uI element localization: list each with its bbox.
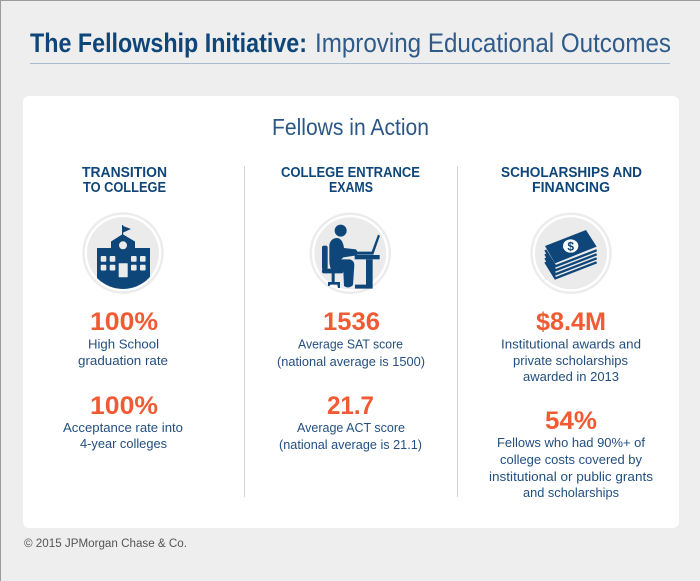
stat: graduation rate bbox=[78, 308, 168, 368]
footer copyright: © 2015 JPMorgan Chase & Co. bbox=[24, 538, 187, 550]
stat: acceptance rate bbox=[63, 392, 183, 451]
stat: graduation rate: 100% bbox=[90, 308, 158, 336]
stat: ACT score bbox=[279, 392, 422, 452]
stat: graduation rate: graduation rate bbox=[78, 353, 168, 368]
heading: college entrance exams: COLLEGE ENTRANCE bbox=[281, 165, 420, 181]
stat: SAT score: 1536 bbox=[323, 308, 380, 336]
column: scholarships and financing bbox=[489, 165, 654, 500]
panel heading: Fellows in Action bbox=[272, 114, 429, 140]
icon: school building bbox=[84, 214, 162, 295]
stat: costs covered: Fellows who had 90%+ of bbox=[497, 435, 645, 450]
stat: scholarship dollars: private scholarships bbox=[513, 353, 628, 368]
heading: scholarships and financing: FINANCING bbox=[532, 180, 610, 196]
stat: SAT score: (national average is 1500) bbox=[277, 354, 425, 369]
icon: stack of money bbox=[532, 214, 610, 293]
stat: ACT score: (national average is 21.1) bbox=[279, 437, 422, 452]
stat: acceptance rate: 4-year colleges bbox=[80, 436, 167, 451]
stat: costs covered: 54% bbox=[545, 407, 597, 435]
stat: costs covered: college costs covered by bbox=[500, 452, 642, 467]
title: The Fellowship Initiative: bbox=[30, 28, 307, 58]
stat: costs covered: and scholarships bbox=[523, 485, 619, 500]
stat: ACT score: 21.7 bbox=[327, 392, 374, 420]
stat: scholarship dollars: Institutional awards and bbox=[501, 337, 641, 352]
stat: SAT score bbox=[277, 308, 425, 369]
icon: student at desk bbox=[311, 214, 390, 293]
heading: transition to college: TO COLLEGE bbox=[83, 180, 166, 196]
panel: fellows in action bbox=[23, 96, 679, 528]
heading: college entrance exams: EXAMS bbox=[329, 180, 373, 196]
column: transition to college bbox=[63, 165, 183, 451]
stat: scholarship dollars: awarded in 2013 bbox=[523, 369, 619, 384]
icon: stack of money: $ bbox=[567, 239, 574, 253]
column: college entrance exams bbox=[277, 165, 425, 452]
stat: scholarship dollars: $8.4M bbox=[536, 308, 606, 336]
stat: acceptance rate: Acceptance rate into bbox=[63, 420, 183, 435]
stat: costs covered bbox=[489, 407, 654, 500]
heading: transition to college: TRANSITION bbox=[82, 165, 167, 181]
stat: ACT score: Average ACT score bbox=[297, 420, 405, 435]
stat: scholarship dollars bbox=[501, 308, 641, 384]
stat: costs covered: institutional or public grants bbox=[489, 469, 654, 484]
stat: graduation rate: High School bbox=[88, 337, 159, 352]
stat: SAT score: Average SAT score bbox=[298, 337, 403, 352]
stat: acceptance rate: 100% bbox=[90, 392, 158, 420]
heading: scholarships and financing: SCHOLARSHIPS AND bbox=[501, 165, 642, 181]
